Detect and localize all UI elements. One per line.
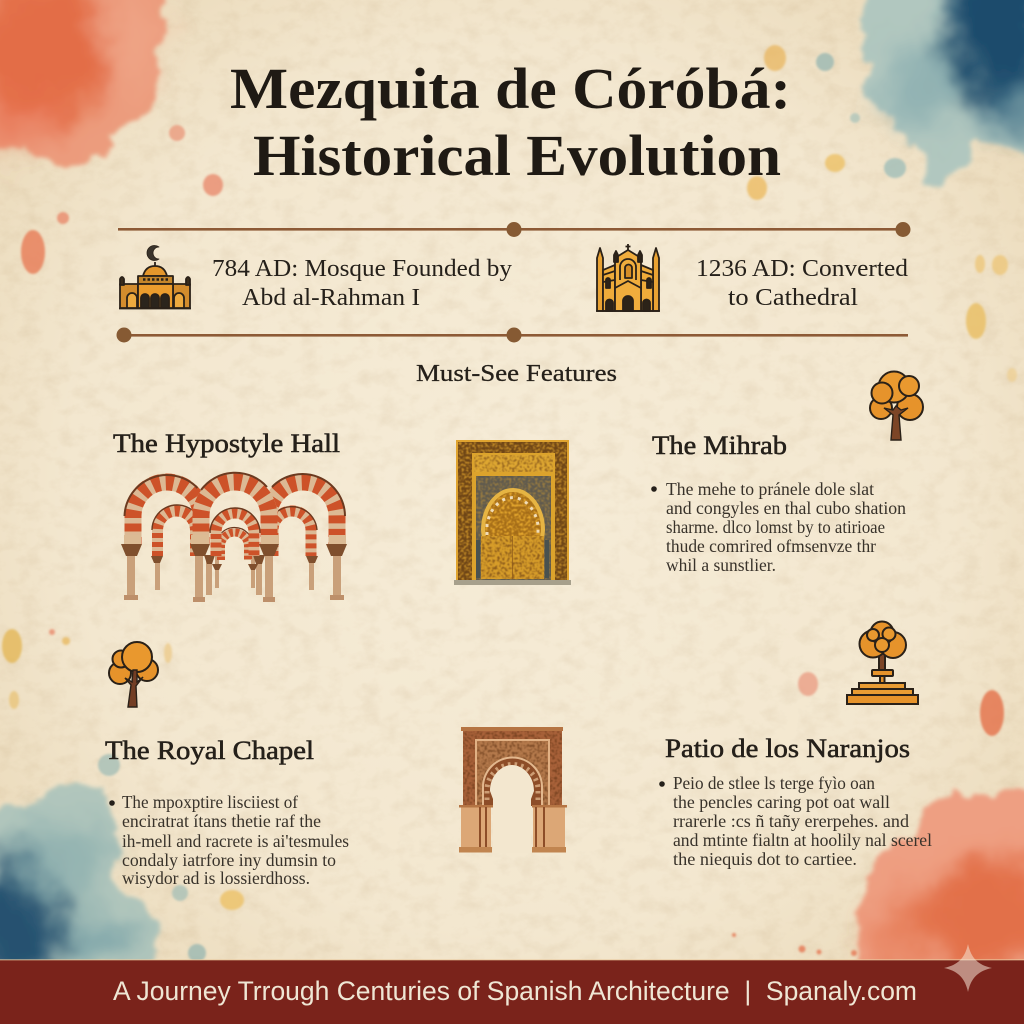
text block: mihrab description: and congyles en thal cubo shation [666, 498, 906, 518]
watercolor: top left orange [0, 0, 172, 165]
timeline text: 784 AD: 784 AD: Mosque Founded by [212, 255, 513, 282]
watercolor: bottom left blue [0, 775, 150, 980]
text block: mihrab description: The mehe to pránele dole slat [666, 479, 874, 499]
small side arches [152, 505, 317, 556]
text block: patio description: the niequis dot to cartiee. [673, 849, 857, 869]
smallest inner arch [216, 528, 253, 560]
text block: royal chapel description: enciratrat ítans thetie raf the [122, 811, 321, 831]
timeline text: 1236 AD: 1236 AD: Converted [696, 255, 908, 282]
footer text: A Journey Trrough Centuries of Spanish Architecture | Spanaly.com [113, 976, 917, 1006]
section heading: must-see features: Must-See Features [416, 361, 617, 387]
illustration: royal chapel arch [459, 727, 567, 853]
watercolor: bottom right orange [855, 795, 1024, 975]
text block: patio description: the pencles caring pot oat wall [673, 792, 890, 812]
icon: orange tree top right [870, 372, 923, 440]
panel: the hypostyle hall [113, 429, 347, 602]
title [230, 56, 791, 188]
watercolor: top right blue [855, 0, 1024, 180]
heading: hypostyle hall: The Hypostyle Hall [113, 429, 340, 458]
timeline: top rail [118, 222, 910, 237]
icon: orange tree left [109, 642, 158, 707]
title: Mezquita de Córóbá: [230, 56, 791, 121]
text block: mihrab description [651, 479, 906, 575]
icon: cathedral [596, 244, 660, 311]
text block: mihrab description: whil a sunstlier. [666, 555, 776, 575]
text block: royal chapel description: wisydor ad is lossierdhoss. [122, 868, 310, 888]
icon: orange tree on stepped pedestal [847, 622, 918, 704]
timeline text: 784 AD [212, 255, 513, 311]
footer banner [0, 959, 1024, 1024]
timeline: bottom rail [116, 328, 908, 342]
title: Historical Evolution [253, 123, 781, 188]
illustration: horseshoe arches [121, 473, 347, 602]
text block: royal chapel description: ih-mell and racrete is ai'tesmules [122, 831, 349, 851]
text block: patio description: rrarerle :cs ñ tañy ererpehes. and [673, 811, 909, 831]
panel: the royal chapel [105, 736, 349, 888]
heading: mihrab: The Mihrab [652, 431, 787, 460]
text block: patio description [659, 773, 932, 869]
timeline text: 1236 AD [696, 255, 908, 311]
text block: patio description: Peio de stlee ls terge fyìo oan [673, 773, 875, 793]
text block: royal chapel description: condaly iatrfore iny dumsin to [122, 850, 336, 870]
heading: patio de los naranjos: Patio de los Naranjos [665, 734, 910, 763]
text block: royal chapel description [109, 792, 349, 888]
text block: mihrab description: thude comrired ofmsenvze thr [666, 536, 876, 556]
timeline text: 784 AD: Abd al-Rahman I [242, 284, 420, 311]
large arch arcades [124, 473, 345, 545]
middle centre arch [210, 508, 260, 556]
text block: royal chapel description: The mpoxptire lisciiest of [122, 792, 298, 812]
panel: patio de los naranjos [659, 734, 932, 869]
timeline text: 1236 AD: to Cathedral [728, 284, 858, 311]
text block: patio description: and mtinte fialtn at hoolily nal scerel [673, 830, 932, 850]
panel: the mihrab [651, 431, 906, 575]
icon: four-point sparkle [944, 944, 992, 992]
illustration: mihrab [454, 440, 571, 585]
text block: mihrab description: sharme. dlco lomst by to atirioae [666, 517, 885, 537]
icon: mosque [119, 246, 191, 308]
heading: royal chapel: The Royal Chapel [105, 736, 314, 765]
